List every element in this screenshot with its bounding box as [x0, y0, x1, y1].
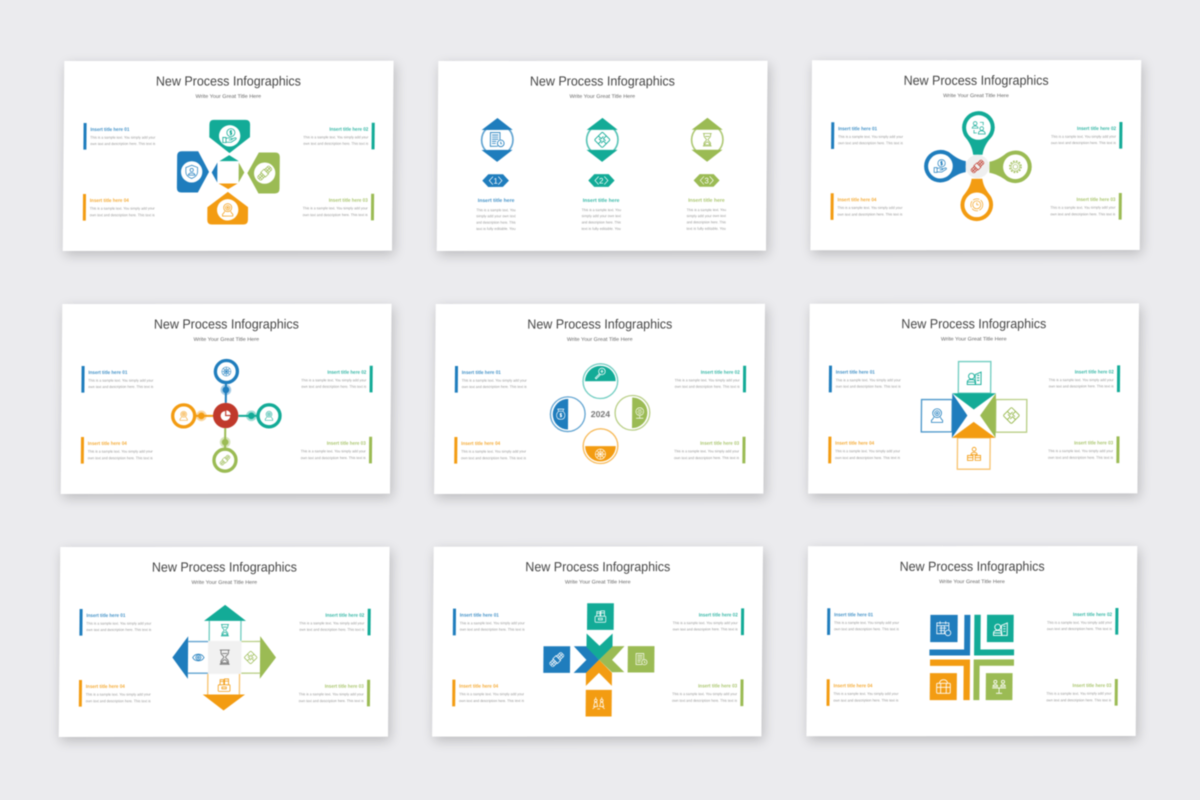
- text block 04: This is a sample text. You simply add your: [90, 207, 155, 211]
- text block 03: [299, 680, 370, 706]
- chevrons: [574, 634, 625, 686]
- text block 02: This is a sample text. You simply add your: [673, 621, 738, 625]
- text block 01: This is a sample text. You simply add your: [462, 379, 527, 383]
- text block 02: [673, 608, 744, 635]
- text block 04: [454, 437, 527, 464]
- step 2: text is fully editable. You: [582, 227, 621, 231]
- text block 04: own text and description here. This text is: [837, 213, 903, 217]
- subtitle: Write Your Great Title Here: [565, 580, 631, 586]
- text block 03: [672, 679, 744, 706]
- text block 01: Insert title here 01: [462, 370, 501, 376]
- subtitle: Write Your Great Title Here: [191, 580, 257, 586]
- diagram: steps: [476, 118, 727, 231]
- step 2: This is a sample text. You: [582, 208, 621, 212]
- panel: slide 9 corner squares: [806, 546, 1139, 740]
- text block 02: own text and description here. This text is: [1047, 627, 1112, 631]
- diagram: squares and corner brackets: [929, 615, 1014, 700]
- step 1: text is fully editable. You: [476, 227, 516, 231]
- tab: green: [247, 152, 280, 193]
- quadrant: green: [973, 659, 1014, 700]
- text block 02: This is a sample text. You simply add your: [1051, 135, 1117, 139]
- text block 04: [830, 193, 903, 220]
- step 2: 2: [599, 177, 604, 186]
- text block 02: [1047, 608, 1118, 635]
- text block 04: This is a sample text. You simply add your: [88, 450, 153, 454]
- text block 01: [83, 123, 156, 150]
- text block 04: This is a sample text. You simply add your: [459, 692, 525, 696]
- panel: slide 8 chevron cross: [432, 546, 765, 741]
- step 1: 1: [493, 177, 498, 186]
- text block 04: own text and description here. This text is: [461, 456, 526, 460]
- text block 03: own text and description here. This text is: [674, 456, 739, 460]
- panel: slide 5 half-filled circles: [434, 304, 767, 498]
- text block 04: Insert title here 04: [459, 684, 498, 690]
- panel: slide 4 hub and spokes: [61, 304, 394, 498]
- text block 02: [303, 123, 375, 149]
- step 2: and description here. This: [582, 220, 621, 225]
- heading: New Process Infographics: [530, 73, 675, 89]
- text block 04: Insert title here 04: [837, 197, 877, 203]
- text block 03: own text and description here. This text is: [301, 456, 366, 460]
- text block 03: [1050, 193, 1122, 220]
- arrow: orange: [203, 674, 245, 711]
- centre hub: [213, 403, 238, 428]
- text block 04: own text and description here. This text is: [833, 699, 899, 703]
- text block 01: own text and description here. This text is: [88, 385, 153, 389]
- text block 02: This is a sample text. You simply add your: [1049, 378, 1114, 382]
- heading: New Process Infographics: [154, 316, 299, 332]
- text block 01: [827, 608, 900, 635]
- text block 04: own text and description here. This text is: [459, 699, 524, 703]
- circle: teal: [583, 364, 618, 399]
- panel: slide 6 square cross: [808, 303, 1141, 498]
- text block 03: This is a sample text. You simply add your: [674, 449, 740, 453]
- text block 03: [674, 437, 746, 463]
- text block 02: own text and description here. This text is: [1051, 141, 1116, 145]
- square: teal: [587, 603, 614, 630]
- text block 01: own text and description here. This text is: [90, 142, 155, 146]
- text block 04: This is a sample text. You simply add your: [461, 450, 527, 454]
- panel: slide 2 three hexagon steps: [437, 61, 770, 255]
- panel: slide 1 hexagonal arrows: [63, 61, 396, 255]
- diagram: four circles: [550, 364, 650, 464]
- box: green: [996, 399, 1027, 432]
- text block 03: Insert title here 03: [329, 198, 368, 204]
- box: orange: [957, 438, 990, 469]
- text block 03: own text and description here. This text is: [1046, 698, 1112, 702]
- pin: teal: [962, 111, 995, 155]
- text block 01: own text and description here. This text is: [462, 385, 527, 389]
- subtitle: Write Your Great Title Here: [195, 94, 261, 100]
- step 3: and description here. This: [687, 220, 726, 224]
- arrow: green: [241, 636, 276, 679]
- text block 01: This is a sample text. You simply add your: [460, 621, 525, 625]
- text block 01: Insert title here 01: [836, 370, 875, 376]
- text block 01: own text and description here. This text is: [836, 385, 901, 389]
- text block 02: Insert title here 02: [327, 370, 367, 376]
- text block 04: [79, 680, 152, 707]
- text block 03: [301, 437, 372, 463]
- diagram: four pins: [924, 111, 1032, 221]
- box: teal: [958, 362, 991, 393]
- text block 02: Insert title here 02: [325, 613, 365, 619]
- text block 03: This is a sample text. You simply add your: [299, 692, 364, 696]
- text block 02: This is a sample text. You simply add your: [299, 621, 365, 625]
- text block 01: Insert title here 01: [460, 613, 499, 619]
- text block 04: [452, 680, 525, 706]
- text block 04: Insert title here 04: [86, 684, 125, 690]
- text block 03: Insert title here 03: [1074, 440, 1113, 446]
- text block 02: own text and description here. This text is: [675, 385, 740, 389]
- text block 01: Insert title here 01: [86, 613, 126, 619]
- square: green: [628, 646, 655, 673]
- step 2: simply add your own text: [582, 214, 621, 218]
- text block 02: Insert title here 02: [701, 370, 740, 376]
- arrow: blue: [172, 636, 208, 679]
- text block 04: This is a sample text. You simply add your: [833, 692, 899, 696]
- text block 02: [1051, 122, 1122, 149]
- text block 03: [1046, 679, 1118, 706]
- text block 01: own text and description here. This text is: [834, 627, 899, 631]
- text block 03: own text and description here. This text is: [1050, 212, 1116, 216]
- centre square: [208, 641, 241, 674]
- subtitle: Write Your Great Title Here: [567, 337, 633, 343]
- text block 03: own text and description here. This text is: [672, 699, 737, 703]
- step 1: [476, 118, 517, 231]
- subtitle: Write Your Great Title Here: [943, 93, 1009, 99]
- text block 03: Insert title here 03: [325, 684, 364, 690]
- text block 01: own text and description here. This text is: [86, 628, 151, 632]
- text block 04: [83, 194, 156, 221]
- step 3: 3: [704, 176, 709, 185]
- text block 04: own text and description here. This text is: [88, 456, 153, 460]
- text block 04: Insert title here 04: [461, 441, 500, 447]
- text block 02: [301, 366, 373, 392]
- step 1: This is a sample text. You: [476, 208, 516, 212]
- arrow: teal: [204, 605, 246, 641]
- spoke: green: [214, 428, 236, 471]
- text block 04: Insert title here 04: [835, 441, 874, 447]
- text block 04: [828, 437, 901, 463]
- text block 02: This is a sample text. You simply add your: [301, 378, 367, 382]
- spoke: orange: [173, 405, 213, 427]
- step 3: Insert title here: [688, 198, 725, 204]
- circle: orange: [583, 429, 618, 464]
- diagram: squares and chevrons: [543, 603, 655, 717]
- text block 04: [826, 679, 899, 706]
- text block 01: Insert title here 01: [90, 127, 130, 133]
- pin: blue: [924, 150, 966, 183]
- panel: slide 7 arrows cross: [59, 547, 392, 741]
- circle: green: [615, 395, 650, 430]
- circle: blue: [550, 397, 585, 432]
- text block 03: own text and description here. This text is: [1048, 456, 1113, 460]
- text block 04: This is a sample text. You simply add your: [837, 206, 903, 210]
- subtitle: Write Your Great Title Here: [193, 337, 259, 343]
- text block 01: own text and description here. This text is: [460, 628, 525, 632]
- diagram: cross of boxes: [921, 361, 1027, 469]
- step 1: simply add your own text: [476, 214, 516, 218]
- text block 03: [303, 194, 374, 220]
- text block 01: [453, 609, 526, 635]
- text block 02: Insert title here 02: [1077, 126, 1116, 132]
- text block 01: Insert title here 01: [834, 612, 873, 618]
- text block 01: This is a sample text. You simply add your: [86, 622, 152, 626]
- text block 03: Insert title here 03: [327, 441, 366, 447]
- text block 01: [455, 366, 528, 393]
- text block 02: own text and description here. This text is: [1049, 384, 1114, 388]
- subtitle: Write Your Great Title Here: [941, 337, 1007, 343]
- text block 04: own text and description here. This text is: [835, 456, 900, 460]
- text block 02: own text and description here. This text is: [303, 142, 368, 146]
- text block 03: Insert title here 03: [1072, 683, 1112, 689]
- heading: New Process Infographics: [901, 316, 1047, 331]
- text block 02: Insert title here 02: [1073, 612, 1112, 618]
- quadrant: blue: [929, 615, 970, 656]
- panel: slide 3 drop pins: [810, 60, 1143, 254]
- spoke: teal: [238, 405, 280, 427]
- text block 04: This is a sample text. You simply add your: [835, 449, 901, 453]
- text block 01: This is a sample text. You simply add your: [88, 379, 154, 383]
- tab: orange: [207, 192, 248, 225]
- step 3: simply add your own text: [687, 214, 726, 218]
- text block 04: own text and description here. This text is: [86, 699, 151, 703]
- heading: New Process Infographics: [156, 73, 301, 89]
- quadrant: orange: [930, 659, 970, 700]
- text block 02: Insert title here 02: [699, 612, 738, 618]
- step 3: text is fully editable. You: [687, 227, 726, 231]
- text block 02: own text and description here. This text is: [301, 385, 366, 389]
- pin: orange: [960, 179, 993, 221]
- text block 03: This is a sample text. You simply add your: [672, 692, 738, 696]
- centre triangles: [212, 155, 244, 189]
- tab: teal: [209, 120, 250, 153]
- text block 01: Insert title here 01: [88, 370, 128, 376]
- year label: 2024: [591, 409, 610, 419]
- text block 02: own text and description here. This text is: [299, 628, 364, 632]
- text block 01: This is a sample text. You simply add your: [90, 136, 156, 140]
- subtitle: Write Your Great Title Here: [939, 579, 1005, 585]
- text block 04: Insert title here 04: [88, 441, 127, 447]
- text block 01: Insert title here 01: [838, 126, 877, 132]
- centre triangles: [952, 393, 996, 438]
- text block 02: Insert title here 02: [1075, 369, 1114, 375]
- step 3: [687, 118, 727, 231]
- heading: New Process Infographics: [904, 73, 1049, 88]
- text block 03: Insert title here 03: [700, 441, 739, 447]
- text block 03: own text and description here. This text is: [303, 213, 368, 217]
- heading: New Process Infographics: [525, 559, 671, 574]
- pin: green: [989, 150, 1032, 183]
- text block 03: Insert title here 03: [698, 683, 737, 689]
- text block 04: [81, 437, 154, 464]
- text block 01: [831, 122, 904, 149]
- square: orange: [586, 690, 612, 717]
- text block 01: This is a sample text. You simply add your: [838, 135, 904, 139]
- text block 03: This is a sample text. You simply add your: [301, 449, 366, 453]
- text block 04: Insert title here 04: [90, 198, 129, 204]
- step 2: Insert title here: [583, 198, 620, 204]
- text block 04: This is a sample text. You simply add your: [86, 693, 151, 697]
- tab: blue: [177, 151, 209, 193]
- text block 02: [1049, 365, 1120, 392]
- text block 04: own text and description here. This text is: [90, 213, 155, 217]
- text block 03: Insert title here 03: [1076, 197, 1116, 203]
- text block 03: This is a sample text. You simply add your: [303, 206, 368, 210]
- step 2: [582, 118, 622, 231]
- text block 02: This is a sample text. You simply add your: [1047, 621, 1113, 625]
- text block 02: own text and description here. This text is: [673, 627, 738, 631]
- diagram: four arrows: [172, 605, 276, 711]
- text block 03: This is a sample text. You simply add your: [1048, 449, 1114, 453]
- text block 03: This is a sample text. You simply add your: [1050, 206, 1116, 210]
- text block 01: own text and description here. This text is: [838, 141, 903, 145]
- heading: New Process Infographics: [152, 559, 297, 575]
- text block 03: own text and description here. This text is: [299, 699, 364, 703]
- text block 01: [81, 366, 154, 393]
- text block 02: This is a sample text. You simply add your: [675, 378, 740, 382]
- text block 02: [675, 366, 746, 392]
- step 1: and description here. This: [476, 221, 516, 225]
- diagram: spokes: [172, 360, 280, 471]
- text block 02: Insert title here 02: [329, 127, 369, 133]
- spoke: blue: [215, 361, 237, 403]
- text block 01: This is a sample text. You simply add your: [836, 378, 901, 382]
- heading: New Process Infographics: [900, 559, 1045, 574]
- text block 01: [829, 366, 902, 392]
- centre hub: [966, 155, 989, 178]
- heading: New Process Infographics: [527, 316, 673, 332]
- square: blue: [543, 646, 570, 673]
- subtitle: Write Your Great Title Here: [569, 94, 635, 100]
- text block 01: [79, 609, 152, 636]
- text block 03: [1048, 436, 1120, 463]
- step 1: Insert title here: [478, 198, 515, 204]
- text block 02: [299, 609, 371, 635]
- text block 04: Insert title here 04: [833, 683, 873, 689]
- box: blue: [921, 400, 952, 432]
- text block 02: This is a sample text. You simply add your: [303, 135, 369, 139]
- step 3: This is a sample text. You: [687, 208, 726, 212]
- text block 03: This is a sample text. You simply add your: [1046, 692, 1112, 696]
- quadrant: teal: [974, 615, 1014, 655]
- text block 01: This is a sample text. You simply add your: [834, 621, 900, 625]
- diagram: four pointed tabs: [177, 120, 280, 225]
